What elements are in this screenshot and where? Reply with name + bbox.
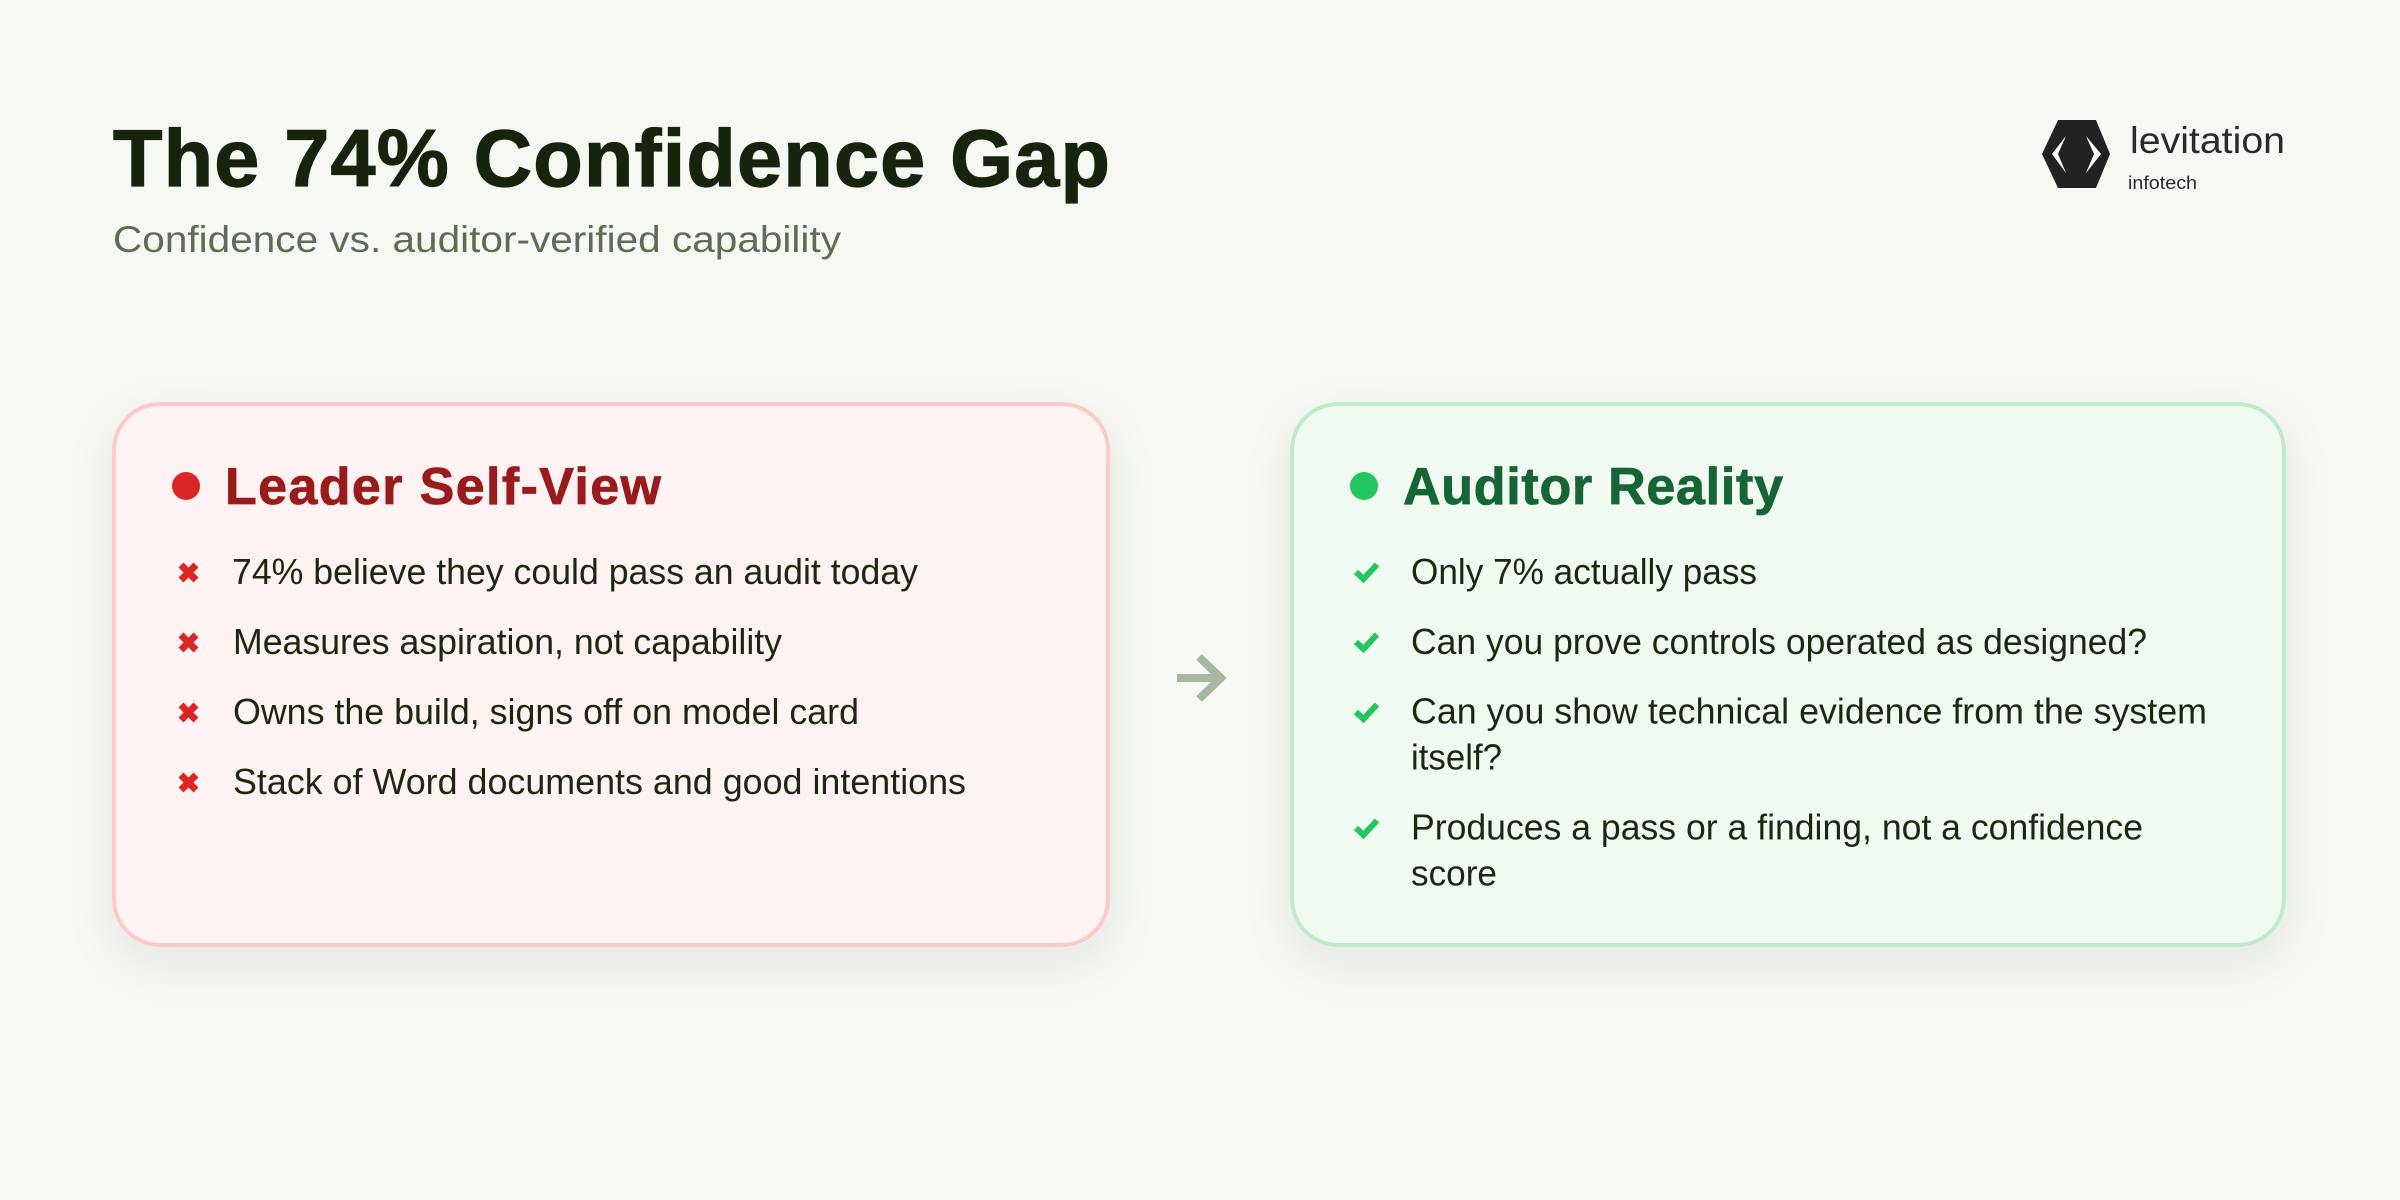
- panel background: [1292, 404, 2284, 945]
- panel: auditor reality: [1292, 404, 2284, 945]
- list item 1: Only 7% actually pass: [1411, 551, 1757, 592]
- list item 4: Produces a pass or a finding, not a confidence: [1411, 806, 2143, 848]
- logo: levitation infotech: [2042, 120, 2285, 193]
- arrow: [1177, 657, 1222, 699]
- panel background: [114, 404, 1108, 945]
- icon: green dot: [1350, 472, 1378, 500]
- title: The 74% Confidence Gap: [113, 114, 1110, 204]
- subtitle: Confidence vs. auditor-verified capability: [113, 219, 842, 260]
- list item 4: score: [1411, 852, 1497, 894]
- list item 3: [1356, 690, 2207, 778]
- panel: leader self-view: [114, 404, 1108, 945]
- heading: leader self-view: Leader Self-View: [225, 458, 662, 516]
- list item 4: [1356, 806, 2143, 894]
- list item 3: Can you show technical evidence from the system: [1411, 690, 2207, 732]
- logo sub-wordmark: infotech: [2128, 172, 2197, 193]
- heading: auditor reality: Auditor Reality: [1403, 458, 1783, 516]
- list item 1: 74% believe they could pass an audit today: [232, 551, 919, 592]
- list item 3: Owns the build, signs off on model card: [233, 691, 859, 732]
- list item 4: Stack of Word documents and good intentions: [233, 761, 966, 802]
- logo wordmark: levitation: [2130, 120, 2285, 161]
- list item 3: itself?: [1411, 736, 1502, 778]
- icon: hexagon logo mark: [2042, 120, 2110, 188]
- icon: red dot: [172, 472, 200, 500]
- list item 2: Can you prove controls operated as designed?: [1411, 621, 2147, 662]
- list item 2: Measures aspiration, not capability: [233, 621, 783, 662]
